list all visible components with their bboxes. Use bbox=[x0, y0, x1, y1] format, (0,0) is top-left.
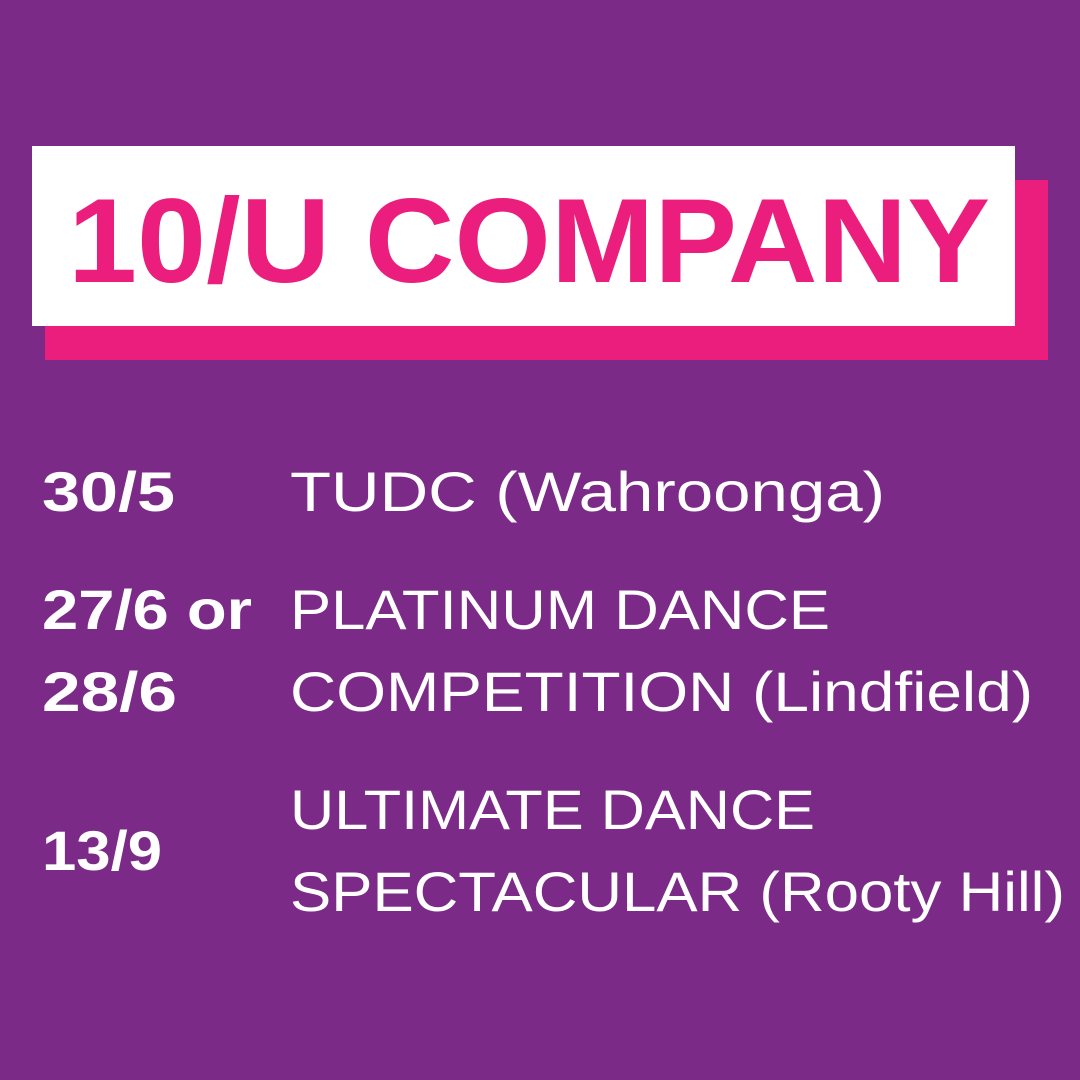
event row: Platinum: PLATINUM DANCE bbox=[290, 578, 830, 641]
event row: Ultimate bbox=[42, 778, 1065, 923]
event row: TUDC bbox=[42, 460, 885, 523]
event row: Platinum: 27/6 or bbox=[42, 578, 252, 641]
banner box bbox=[32, 146, 1015, 326]
event row: Ultimate: ULTIMATE DANCE bbox=[290, 778, 815, 841]
event row: TUDC: 30/5 bbox=[42, 460, 175, 523]
event row: Platinum: 28/6 bbox=[42, 660, 177, 723]
event row: Ultimate: 13/9 bbox=[42, 819, 162, 882]
event row: Ultimate: SPECTACULAR (Rooty Hill) bbox=[290, 860, 1065, 923]
banner shadow bbox=[45, 180, 1048, 360]
event row: Platinum: COMPETITION (Lindfield) bbox=[290, 660, 1033, 723]
event row: Platinum bbox=[42, 578, 1033, 723]
event row: TUDC: TUDC (Wahroonga) bbox=[290, 460, 885, 523]
title text: 10/U COMPANY bbox=[68, 174, 990, 308]
title banner bbox=[32, 146, 1048, 360]
